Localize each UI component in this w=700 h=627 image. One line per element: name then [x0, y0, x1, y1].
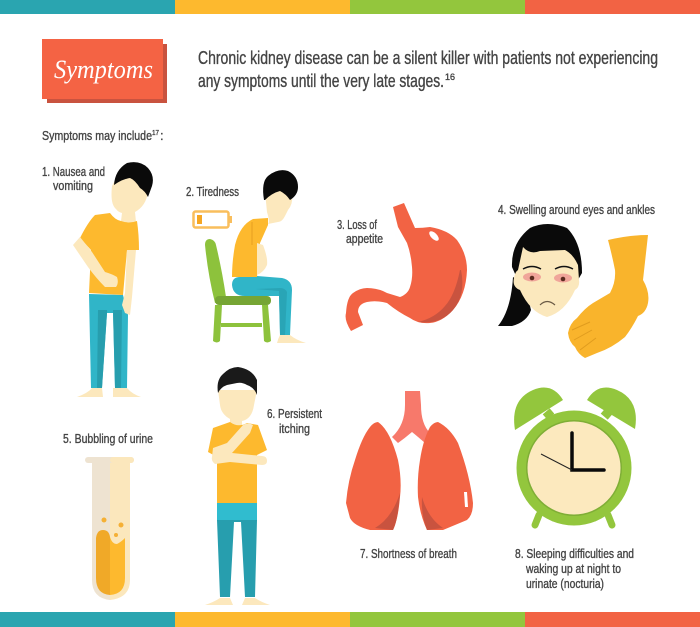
label: loss of appetite: 3. Loss of [337, 217, 377, 232]
subheading: symptoms may include: 17 [152, 130, 159, 137]
seated figure [232, 170, 306, 343]
intro text: any symptoms until the very late stages. [198, 71, 444, 91]
label: persistent itching: 6. Persistent [267, 406, 322, 421]
label: persistent itching [267, 406, 322, 436]
label: nausea and vomiting [42, 164, 105, 193]
label: loss of appetite: appetite [346, 231, 383, 246]
icon: alarm clock [514, 388, 636, 526]
label: sleeping difficulties: waking up at night to [525, 561, 621, 576]
subheading: symptoms may include: : [160, 128, 164, 143]
title badge: Symptoms [42, 39, 167, 103]
label: persistent itching: itching [279, 421, 310, 436]
top colour band [0, 0, 700, 14]
intro text [198, 48, 658, 91]
symptom 3: stomach [337, 203, 467, 331]
icon: stomach [346, 203, 467, 331]
symptom 4: swelling [498, 202, 655, 358]
icon: swollen foot [568, 235, 648, 358]
symptom 8: sleeping difficulties [514, 388, 636, 591]
label: bubbling of urine: 5. Bubbling of urine [63, 431, 153, 446]
label: shortness of breath: 7. Shortness of breath [360, 546, 457, 561]
label: nausea and vomiting: 1. Nausea and [42, 164, 105, 179]
label: sleeping difficulties: urinate (nocturia) [526, 576, 604, 591]
figure body [73, 162, 153, 397]
label: nausea and vomiting: vomiting [53, 178, 93, 193]
symptom 1: nausea figure [42, 162, 153, 397]
icon: test tube [85, 457, 134, 600]
icon: green chair [205, 239, 271, 342]
symptom 7: shortness of breath [346, 391, 473, 561]
intro text: 16 [445, 72, 455, 82]
bottom colour band [0, 612, 700, 627]
label: sleeping difficulties [515, 546, 634, 591]
icon: lungs [346, 391, 473, 530]
icon: woman's face [498, 224, 582, 326]
title badge: Symptoms: Symptoms [54, 55, 153, 84]
label: tiredness: 2. Tiredness [186, 184, 239, 199]
symptom 5: bubbling urine [63, 431, 153, 600]
label: sleeping difficulties: 8. Sleeping difficulties and [515, 546, 634, 561]
label: loss of appetite [337, 217, 383, 246]
itching figure [205, 367, 270, 605]
icon: low battery [194, 212, 232, 228]
symptom 2: tiredness figure [186, 170, 306, 343]
symptom 6: persistent itching [205, 367, 322, 605]
subheading: symptoms may include: Symptoms may include [42, 128, 152, 143]
label: swelling around eyes and ankles: 4. Swelling around eyes and ankles [498, 202, 655, 217]
